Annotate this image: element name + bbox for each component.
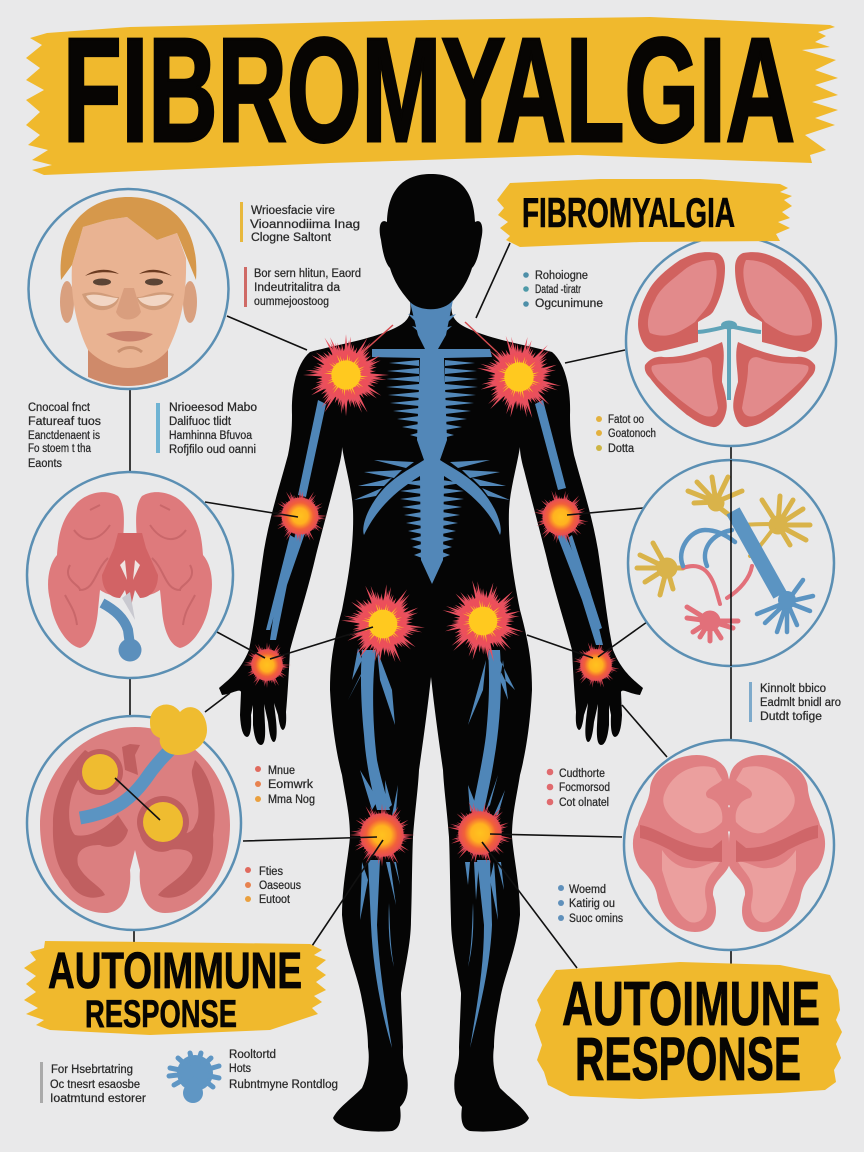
panel: top right brain bbox=[626, 236, 836, 446]
blue nerves in limbs bbox=[266, 400, 603, 1048]
bullets: left lower: Oaseous bbox=[259, 880, 301, 892]
text block: top centre left 2: Bor sern hlitun, Eaord bbox=[254, 268, 361, 280]
icon: blue neuron cell bbox=[169, 1053, 219, 1103]
text block: left column: Cnocoal fnct bbox=[28, 402, 91, 414]
text block: left column: Fo stoem t tha bbox=[28, 443, 92, 455]
text block: bottom centre: Rooltortd bbox=[229, 1049, 276, 1061]
text block: right blue bar bbox=[749, 682, 841, 723]
text block: top centre left 1: Clogne Saltont bbox=[251, 232, 332, 244]
panel: neurons bbox=[628, 460, 834, 666]
bullets: blue right: Woemd bbox=[569, 884, 606, 896]
connector lines behind circles bbox=[130, 390, 731, 964]
bullets: left upper bbox=[255, 765, 315, 806]
text block: top centre left 2: oummejoostoog bbox=[254, 296, 329, 308]
bullets: left upper: Mnue bbox=[268, 765, 295, 777]
bullets: yellow: Goatonoch bbox=[608, 428, 656, 440]
bullets: top right: Datad -tiratr bbox=[535, 284, 581, 296]
main title banner bbox=[26, 8, 838, 175]
bullets: left lower: Eutoot bbox=[259, 894, 291, 906]
panel: bottom right brain bbox=[624, 740, 834, 950]
text block: top centre left 2: Indeutritalitra da bbox=[254, 282, 341, 294]
banner: Autoimmune Response left: AUTOIMMUNE bbox=[48, 942, 302, 999]
bullets: top right bbox=[523, 270, 603, 310]
text block: blue bar note: Rofjfilo oud oanni bbox=[169, 444, 256, 456]
bullets: yellow: Fatot oo bbox=[608, 414, 644, 426]
bullets: left upper: Eomwrk bbox=[268, 779, 313, 791]
panel: bottom left organ bbox=[27, 705, 241, 930]
text block: top centre left 1: Vioannodiima Inag bbox=[250, 219, 360, 231]
text block: right blue bar: Kinnolt bbico bbox=[760, 683, 826, 695]
bullets: red right bbox=[547, 768, 610, 809]
subtitle banner: Fibromyalgia bbox=[497, 179, 792, 247]
text block: left column: Eaonts bbox=[28, 458, 62, 470]
text block: top centre left 1 bbox=[240, 202, 360, 244]
pain burst: left hip bbox=[335, 578, 431, 671]
blue neuron bbox=[681, 511, 813, 632]
bullets: top right: Rohoiogne bbox=[535, 270, 588, 282]
text block: left column bbox=[28, 402, 101, 470]
calf nerves bbox=[368, 860, 392, 1048]
text block: top centre left 2 bbox=[244, 267, 361, 308]
pain burst: right knee bbox=[440, 794, 520, 872]
text block: left column: Fatureaf tuos bbox=[28, 416, 101, 428]
bullets: left upper: Mma Nog bbox=[268, 794, 315, 806]
text block: bottom left grey bar: Oc tnesrt esaosbe bbox=[50, 1079, 140, 1091]
panel: face bbox=[28, 189, 228, 389]
bullets: blue right bbox=[558, 884, 623, 925]
pain burst: right shoulder bbox=[466, 325, 572, 429]
bullets: yellow bbox=[596, 414, 656, 455]
text block: right blue bar: Eadmlt bnidl aro bbox=[760, 697, 841, 709]
red nerve flares from shoulders bbox=[363, 322, 497, 352]
pain burst: right wrist bbox=[567, 637, 625, 694]
text block: blue bar note: Nrioeesod Mabo bbox=[169, 402, 257, 414]
red neuron bbox=[683, 566, 752, 641]
banner: Autoimmune Response left bbox=[24, 941, 326, 1036]
knee fans bbox=[360, 770, 505, 925]
banner: Autoimmune Response left: RESPONSE bbox=[85, 993, 237, 1036]
pain burst: left wrist bbox=[242, 641, 292, 690]
bullets: blue right: Suoc omins bbox=[569, 913, 623, 925]
text block: left column: Eanctdenaent is bbox=[28, 430, 100, 442]
text block: top centre left 1: Wrioesfacie vire bbox=[251, 205, 335, 217]
text block: blue bar note bbox=[156, 402, 257, 456]
text block: right blue bar: Dutdt tofige bbox=[760, 711, 822, 723]
bullets: left lower: Fties bbox=[259, 866, 283, 878]
bullets: red right: Focmorsod bbox=[559, 782, 610, 794]
arm nerves bbox=[266, 400, 603, 645]
bullets: top right: Ogcunimune bbox=[535, 298, 603, 310]
text block: blue bar note: Dalifuoc tlidt bbox=[169, 416, 232, 428]
text block: bottom centre: Rubntmyne Rontdlog bbox=[229, 1079, 338, 1091]
text block: bottom left grey bar: For Hsebrtatring bbox=[51, 1064, 133, 1076]
subtitle banner: Fibromyalgia: FIBROMYALGIA bbox=[522, 189, 735, 236]
bullets: red right: Cot olnatel bbox=[559, 797, 609, 809]
connector lines bbox=[205, 243, 647, 968]
text block: bottom left grey bar: Ioatmtund estorer bbox=[50, 1093, 146, 1105]
bullets: yellow: Dotta bbox=[608, 443, 635, 455]
banner: Autoimune Response right bbox=[535, 962, 842, 1099]
bullets: blue right: Katirig ou bbox=[569, 898, 615, 910]
bullets: left lower bbox=[245, 866, 301, 906]
blue nerve spine and ribs bbox=[354, 300, 510, 584]
yellow neurons bbox=[637, 477, 810, 595]
panel: mid left lungs bbox=[27, 472, 233, 678]
bullets: red right: Cudthorte bbox=[559, 768, 605, 780]
pain burst: left elbow bbox=[270, 488, 329, 545]
pain burst: right hip bbox=[429, 569, 537, 674]
text block: bottom centre: Hots bbox=[229, 1063, 251, 1075]
text block: bottom left grey bar bbox=[40, 1062, 146, 1105]
thigh nerves bbox=[348, 648, 515, 812]
pain burst: left knee bbox=[347, 802, 417, 869]
text block: bottom centre bbox=[229, 1049, 338, 1091]
human body silhouette bbox=[219, 174, 643, 1132]
pain burst: right elbow bbox=[527, 484, 595, 550]
pain burst: left shoulder bbox=[301, 332, 391, 419]
text block: blue bar note: Hamhinna Bfuvoa bbox=[169, 430, 253, 442]
